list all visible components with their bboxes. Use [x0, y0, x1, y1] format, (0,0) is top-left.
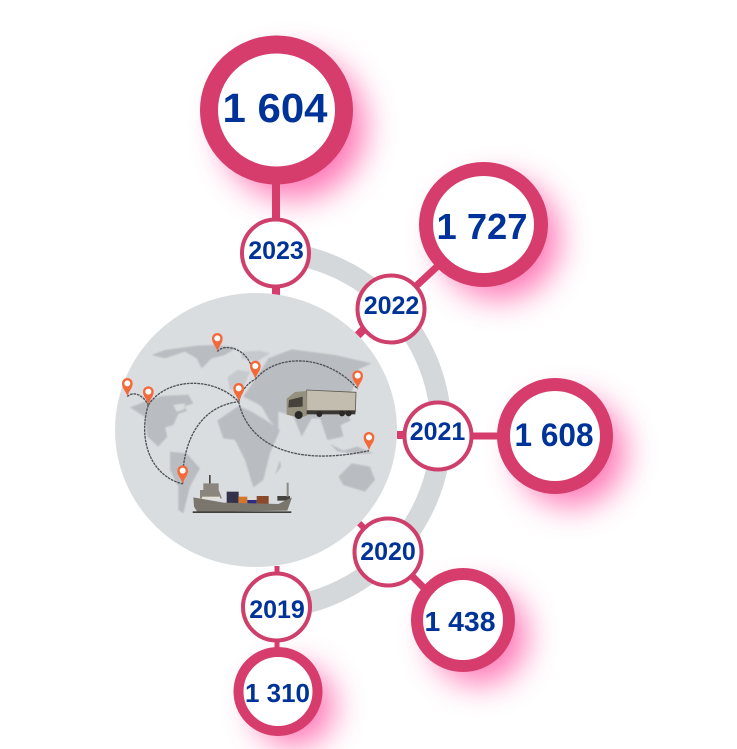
year: 2019: 2019	[249, 596, 305, 624]
globe	[115, 293, 397, 567]
year: 2022	[358, 276, 424, 342]
value: 2022	[426, 169, 541, 280]
year: 2020: 2020	[360, 538, 416, 566]
location pins	[122, 333, 374, 484]
value: 2021: 1 608	[514, 417, 594, 453]
year: 2021	[404, 402, 472, 470]
shipping routes	[127, 348, 369, 484]
value: 2023	[209, 44, 344, 176]
pink glows	[221, 55, 625, 746]
year: 2020	[354, 518, 422, 586]
year: 2023	[242, 220, 309, 286]
connectors	[276, 180, 500, 652]
year: 2023: 2023	[248, 237, 304, 265]
icon: container ship	[193, 475, 292, 513]
value: 2019: 1 310	[245, 678, 310, 708]
icon: truck	[287, 390, 356, 419]
value: 2023: 1 604	[222, 85, 328, 131]
value: 2020	[417, 574, 509, 666]
value: 2022: 1 727	[436, 206, 528, 247]
world map	[130, 345, 375, 513]
year: 2022: 2022	[364, 292, 419, 320]
grey arc ring	[276, 252, 441, 608]
value: 2021	[504, 384, 606, 488]
value: 2020: 1 438	[424, 606, 496, 637]
year: 2019	[243, 574, 310, 640]
year: 2021: 2021	[410, 418, 465, 446]
value: 2019	[238, 652, 318, 731]
